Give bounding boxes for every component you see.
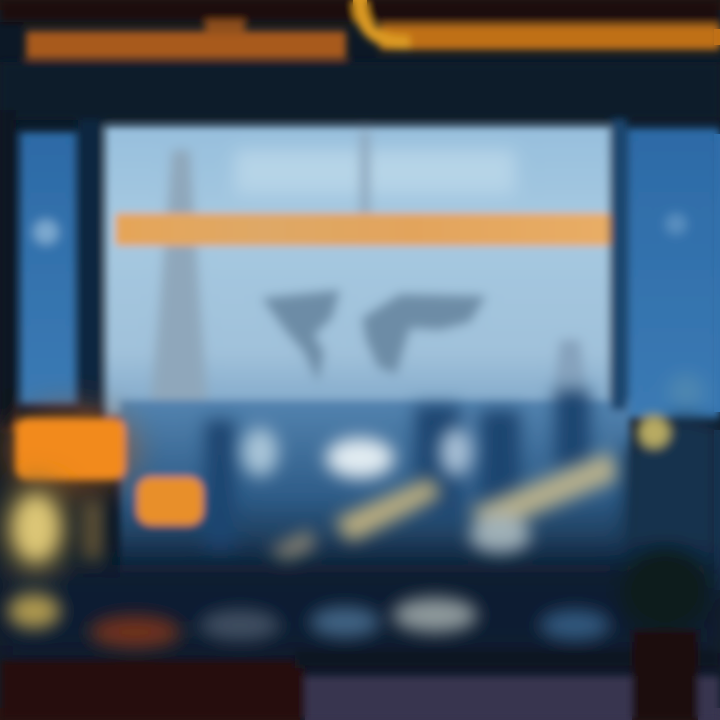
lamp stem glow [84,500,102,560]
lamp: dim base glow [8,594,60,628]
ceiling beam: orange light [26,0,720,59]
city skyline [120,374,704,575]
left window [20,132,76,404]
ceiling [0,0,720,120]
city lights [242,374,704,565]
world map [262,290,486,382]
window glare spots [33,150,687,245]
lamp glow halo [2,404,138,496]
desk items [90,598,610,648]
tower [150,130,590,420]
right window [628,128,720,418]
plant [620,548,710,720]
desk: dark band [0,565,720,655]
column between window and right pane [611,120,627,410]
lamp: yellow glow [2,482,70,574]
lamp: large orange [15,418,125,480]
lamp: small orange [137,477,203,525]
left dark wall [0,110,16,430]
floor [0,650,720,720]
distant yellow light [637,415,671,449]
orange banner [115,213,610,246]
right foreground dark building [620,415,720,600]
centre window [105,126,610,416]
left column [78,120,102,410]
